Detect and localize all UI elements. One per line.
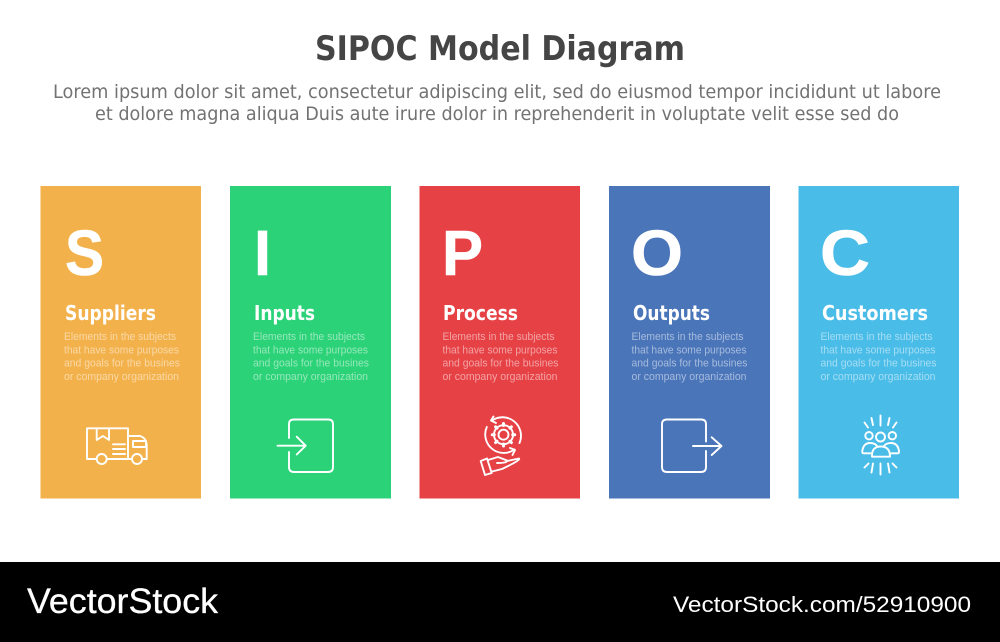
description: suppliers: Elements in the subjects [64, 331, 176, 343]
description: inputs: that have some purposes [253, 344, 368, 356]
description: customers: that have some purposes [820, 344, 936, 356]
description: inputs [253, 331, 369, 383]
subtitle: et dolore magna aliqua Duis aute irure dolor in reprehenderit in voluptate velit esse sed do [95, 103, 899, 125]
description: inputs: or company organization [253, 371, 368, 383]
description: suppliers: or company organization [64, 371, 179, 383]
footer bar [0, 562, 1000, 642]
description: suppliers [64, 331, 180, 383]
icon: gear in hand [481, 416, 521, 475]
panel: suppliers [40, 186, 201, 498]
description: customers: Elements in the subjects [820, 331, 932, 343]
description: process [442, 331, 558, 383]
description: customers: and goals for the busines [820, 358, 936, 370]
description: customers [820, 331, 936, 383]
heading: Inputs: Inputs [254, 301, 315, 325]
subtitle: Lorem ipsum dolor sit amet, consectetur adipiscing elit, sed do eiusmod tempor incididunt ut labore [53, 81, 941, 103]
heading: Customers: Customers [822, 301, 928, 325]
panel: process [420, 186, 580, 498]
description: outputs: or company organization [632, 371, 747, 383]
description: process: and goals for the busines [442, 358, 558, 370]
panel: customers [798, 186, 959, 498]
description: suppliers: that have some purposes [64, 344, 179, 356]
icon: customer group [862, 416, 899, 474]
letter S: S [65, 217, 104, 289]
heading: Process: Process [443, 301, 518, 325]
description: suppliers: and goals for the busines [64, 358, 180, 370]
heading: Suppliers: Suppliers [65, 301, 156, 325]
description: outputs [632, 331, 748, 383]
description: process: Elements in the subjects [442, 331, 554, 343]
description: process: that have some purposes [442, 344, 558, 356]
icon: sign in arrow [278, 420, 333, 472]
title: SIPOC Model Diagram [315, 29, 685, 68]
description: outputs: and goals for the busines [632, 358, 748, 370]
description: customers: or company organization [820, 371, 936, 383]
icon: delivery truck [87, 428, 147, 464]
panel: inputs [230, 186, 391, 498]
letter P: P [442, 217, 483, 289]
letter I: I [254, 217, 271, 289]
description: inputs: Elements in the subjects [253, 331, 365, 343]
description: process: or company organization [442, 371, 558, 383]
footer url: VectorStock.com/52910900 [673, 592, 971, 617]
subtitle [53, 81, 941, 125]
panel: outputs [609, 186, 770, 498]
letter O: O [631, 217, 683, 289]
description: outputs: that have some purposes [632, 344, 746, 356]
letter C: C [820, 217, 870, 289]
footer logo: VectorStock [27, 582, 219, 621]
icon: sign out arrow [662, 420, 722, 472]
description: outputs: Elements in the subjects [632, 331, 744, 343]
description: inputs: and goals for the busines [253, 358, 369, 370]
heading: Outputs: Outputs [633, 301, 710, 325]
